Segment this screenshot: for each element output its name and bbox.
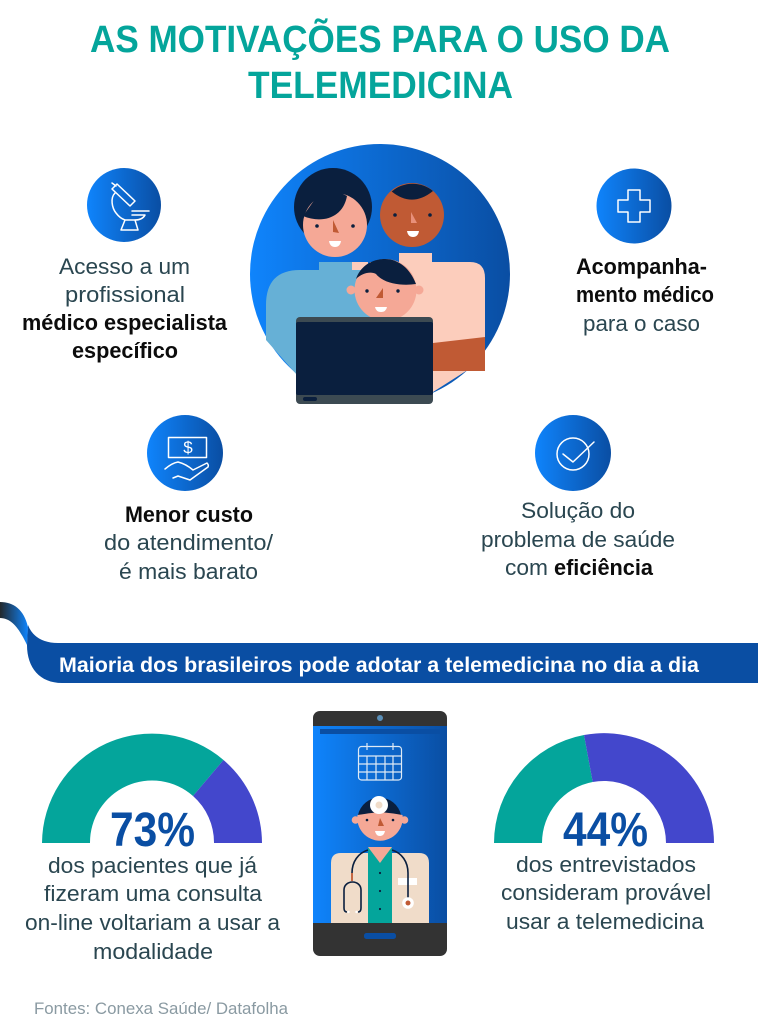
text: acompanhamento: Acompanha-	[576, 254, 707, 279]
text: acompanhamento	[576, 254, 714, 336]
gauge: 44%: 44%	[563, 804, 648, 857]
text: menor custo: é mais barato	[119, 559, 258, 584]
illustration: phone with doctor	[313, 711, 447, 956]
text: menor custo	[104, 502, 274, 584]
illustration: family at laptop	[250, 144, 510, 404]
text: especialista: específico	[72, 338, 178, 363]
text: 73% caption: fizeram uma consulta	[44, 881, 263, 906]
text: especialista: Acesso a um	[59, 254, 190, 279]
text: eficiencia: Solução do	[521, 498, 635, 523]
title: TELEMEDICINA	[248, 65, 513, 107]
text: 73% caption	[25, 853, 281, 964]
text: eficiencia: com	[505, 555, 548, 580]
banner: Maioria dos brasileiros pode adotar a telemedicina no dia a dia	[59, 653, 700, 677]
text: especialista: profissional	[65, 282, 185, 307]
text: eficiencia	[481, 498, 675, 580]
gauge: 73%	[42, 734, 262, 857]
text: 44% caption: consideram provável	[501, 880, 711, 905]
text: 44% caption	[501, 852, 711, 934]
text: eficiencia: problema de saúde	[481, 527, 675, 552]
gauge: 44%	[494, 733, 714, 857]
text: 73% caption: on-line voltariam a usar a	[25, 910, 281, 935]
text: 44% caption: usar a telemedicina	[506, 909, 705, 934]
text: eficiencia: eficiência	[554, 555, 654, 580]
icon: money in hand	[147, 415, 223, 491]
icon: money in hand: $	[183, 438, 193, 457]
source note: Fontes: Conexa Saúde/ Datafolha	[34, 999, 289, 1018]
gauge: 73%: 73%	[110, 804, 195, 857]
text: especialista	[22, 254, 228, 363]
text: menor custo: do atendimento/	[104, 530, 274, 555]
title: AS MOTIVAÇÕES PARA O USO DA	[90, 17, 670, 61]
text: 73% caption: modalidade	[93, 939, 213, 964]
text: 44% caption: dos entrevistados	[516, 852, 696, 877]
banner	[0, 602, 758, 683]
text: acompanhamento: mento médico	[576, 282, 714, 307]
icon: medical cross	[596, 168, 672, 244]
text: menor custo: Menor custo	[125, 502, 253, 527]
icon: check mark	[535, 415, 611, 491]
icon: microscope	[87, 168, 161, 242]
text: acompanhamento: para o caso	[583, 311, 700, 336]
text: 73% caption: dos pacientes que já	[48, 853, 258, 878]
text: especialista: médico especialista	[22, 310, 228, 335]
title	[90, 17, 670, 107]
